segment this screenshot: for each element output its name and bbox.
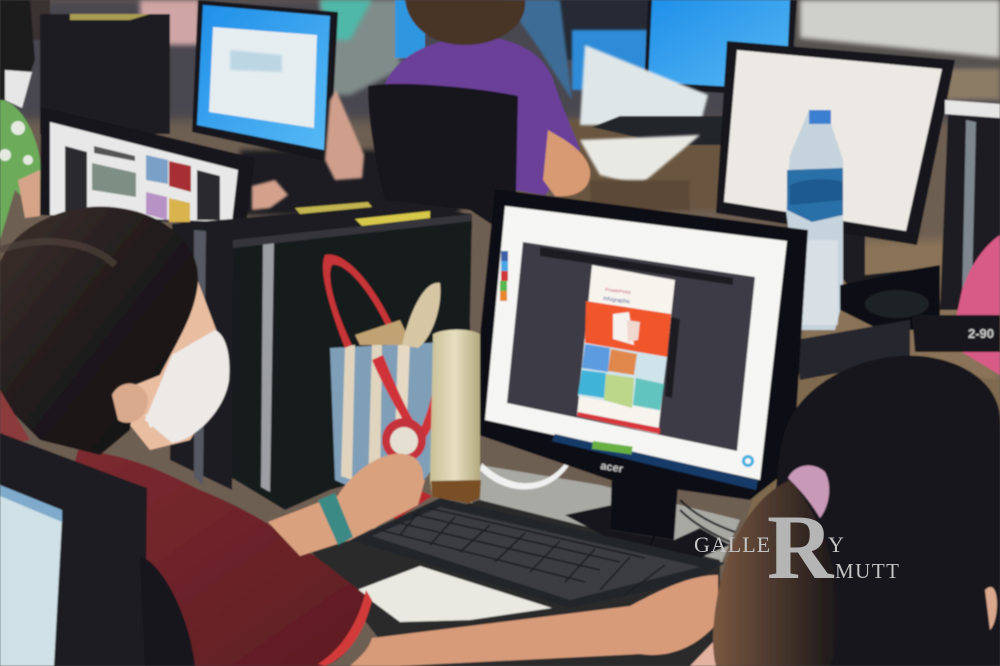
arm <box>268 480 425 556</box>
watermark: Gallery RMUTT: MUTT <box>835 559 900 583</box>
orange band <box>585 301 671 357</box>
person in purple shirt <box>385 0 590 196</box>
flipbook viewer dark area <box>507 242 755 451</box>
tote bag with straps <box>323 255 447 520</box>
far monitor top centre <box>395 0 797 97</box>
hair <box>0 207 198 455</box>
water bottle <box>786 110 843 330</box>
bottom left monitor <box>0 433 195 666</box>
computer tower back <box>170 202 472 490</box>
tower right and desk: 2-90 <box>968 326 994 341</box>
toolbar <box>540 247 733 285</box>
main acer monitor <box>470 189 808 500</box>
watermark: Gallery RMUTT: Y <box>828 532 844 557</box>
background room <box>0 0 1000 420</box>
woman with mask, maroon shirt <box>0 207 718 666</box>
person at left edge green shirt <box>0 0 42 240</box>
document page: Infographic <box>603 296 631 305</box>
share buttons <box>500 251 508 301</box>
document page: PowerPoint <box>605 287 631 296</box>
watermark: Gallery RMUTT: GALLE <box>694 532 771 557</box>
taskbar <box>552 434 758 490</box>
monitor top left blue <box>192 0 338 162</box>
monitor with photo gallery <box>40 107 255 230</box>
woman from behind, foreground right <box>690 356 1000 666</box>
chat bubble <box>742 455 754 467</box>
black office chair <box>368 84 518 240</box>
face <box>110 260 228 450</box>
shirt <box>64 450 372 666</box>
arm behind blue monitor <box>252 90 364 210</box>
paper on desk <box>357 566 552 622</box>
mask <box>145 330 229 443</box>
desk surface under centre <box>310 462 740 666</box>
illustrations <box>578 343 667 411</box>
screen <box>485 206 787 480</box>
icon: powerpoint logo <box>613 312 634 345</box>
keyboard <box>350 498 725 608</box>
computer tower front <box>232 211 472 510</box>
watermark: Gallery RMUTT <box>694 496 900 598</box>
tumbler <box>430 330 481 503</box>
logo: acer <box>600 460 624 476</box>
tower right and desk <box>700 100 1000 666</box>
right back monitor with white screen <box>716 41 955 288</box>
lower arm <box>350 575 718 666</box>
wristband <box>318 493 353 545</box>
tower top left <box>40 14 170 134</box>
paper and keyboard behind <box>580 45 725 210</box>
monitor stand <box>565 470 735 562</box>
ear <box>112 384 148 423</box>
watermark: Gallery RMUTT: R <box>767 496 835 598</box>
document page <box>577 265 675 434</box>
side tools <box>665 317 680 398</box>
